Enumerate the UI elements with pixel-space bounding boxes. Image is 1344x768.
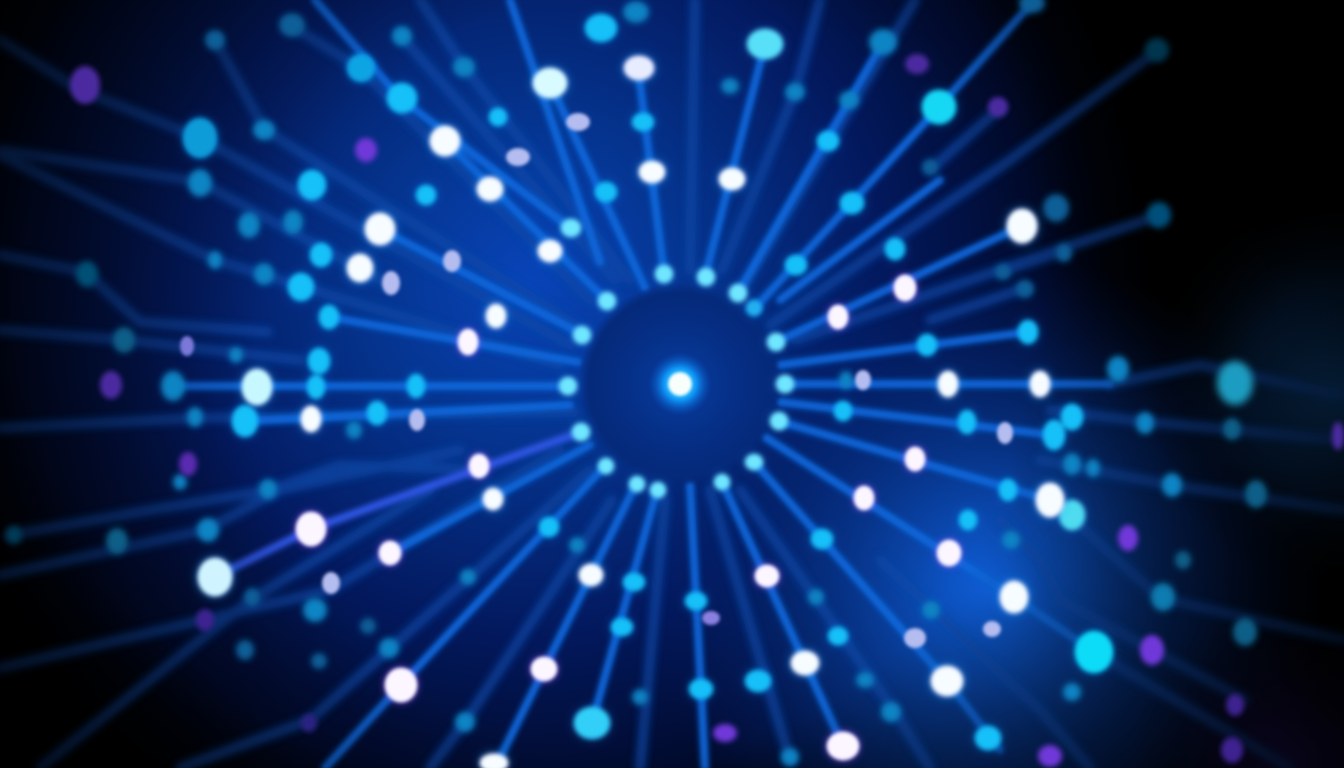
violet-blue spoke (215, 432, 581, 577)
inner ring nodes (559, 219, 794, 498)
white glowing nodes (198, 56, 1064, 768)
white nodes with violet halo (296, 275, 961, 760)
central hub disc (578, 282, 782, 486)
bright radial spokes (173, 0, 1110, 768)
cyan nodes (183, 14, 1113, 750)
central core glow (648, 352, 712, 416)
large out-of-focus teal node (1217, 361, 1253, 405)
faded lilac nodes (180, 113, 1013, 648)
